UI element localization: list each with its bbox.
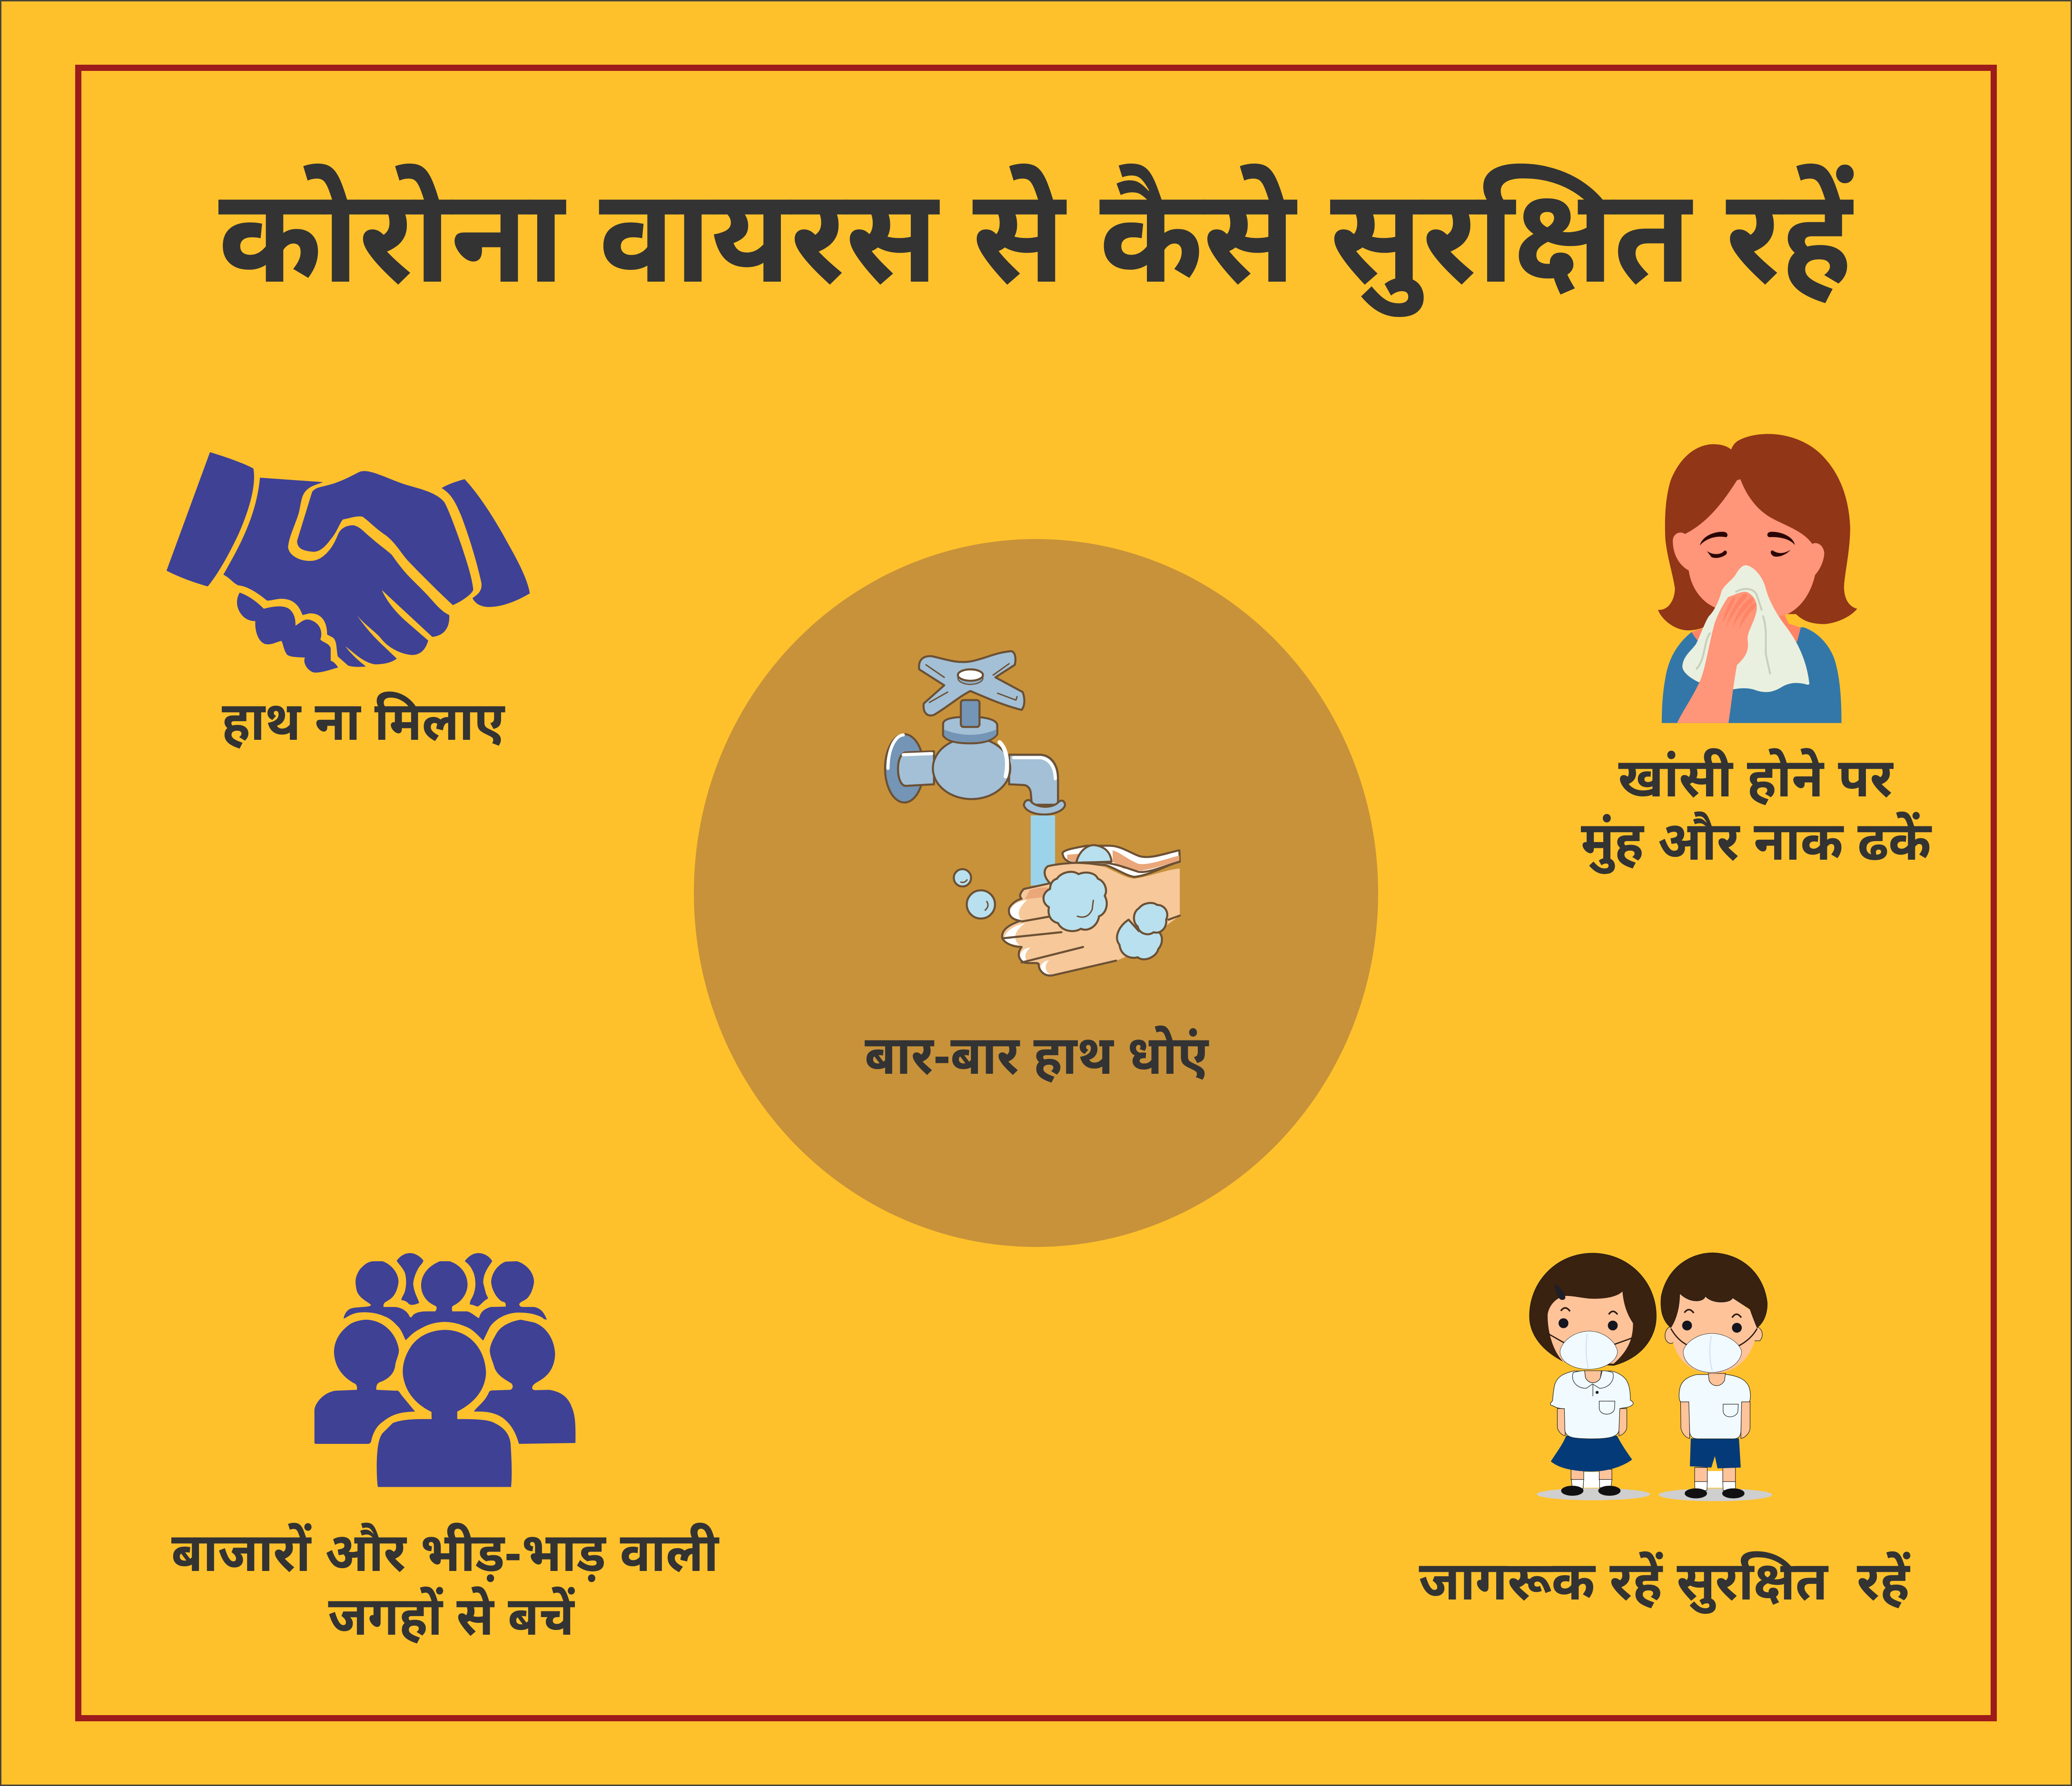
girl [1529,1253,1656,1500]
hair [1658,434,1857,630]
front hand [1002,864,1180,976]
handshake label: हाथ ना मिलाए [222,691,505,751]
icon: two children wearing masks [1529,1253,1772,1501]
neck [1691,614,1801,648]
faucet [885,651,1065,814]
icon: handshake [167,452,530,673]
center circle panel [694,539,1378,1247]
cough label: मुंह और नाक ढकें [1581,811,1932,874]
circle label: बार-बार हाथ धोएं [865,1025,1209,1085]
crowd label [171,1522,720,1646]
soap bubbles [954,869,995,919]
arm and hand [1677,592,1757,723]
title: कोरोना वायरस से कैसे सुरक्षित रहें [218,162,1855,319]
children label: जागरूक रहें सुरक्षित रहें [1419,1551,1911,1614]
crowd label: बाजारों और भीड़-भाड़ वाली [171,1522,720,1582]
icon: crowd of people [315,1253,575,1487]
soap foam [1044,872,1167,959]
face [1673,479,1824,616]
cough label: खांसी होने पर [1618,748,1894,808]
tissue [1682,565,1809,692]
back hand [1063,846,1180,877]
eyes and brows [1700,532,1795,558]
crowd label: जगहों से बचें [328,1586,575,1646]
shirt [1662,627,1842,723]
boy [1659,1253,1772,1501]
water stream [1031,815,1055,885]
icon: woman covering nose with tissue [1658,434,1857,723]
icon: faucet and washing hands [885,651,1180,976]
cough label [1581,748,1932,874]
